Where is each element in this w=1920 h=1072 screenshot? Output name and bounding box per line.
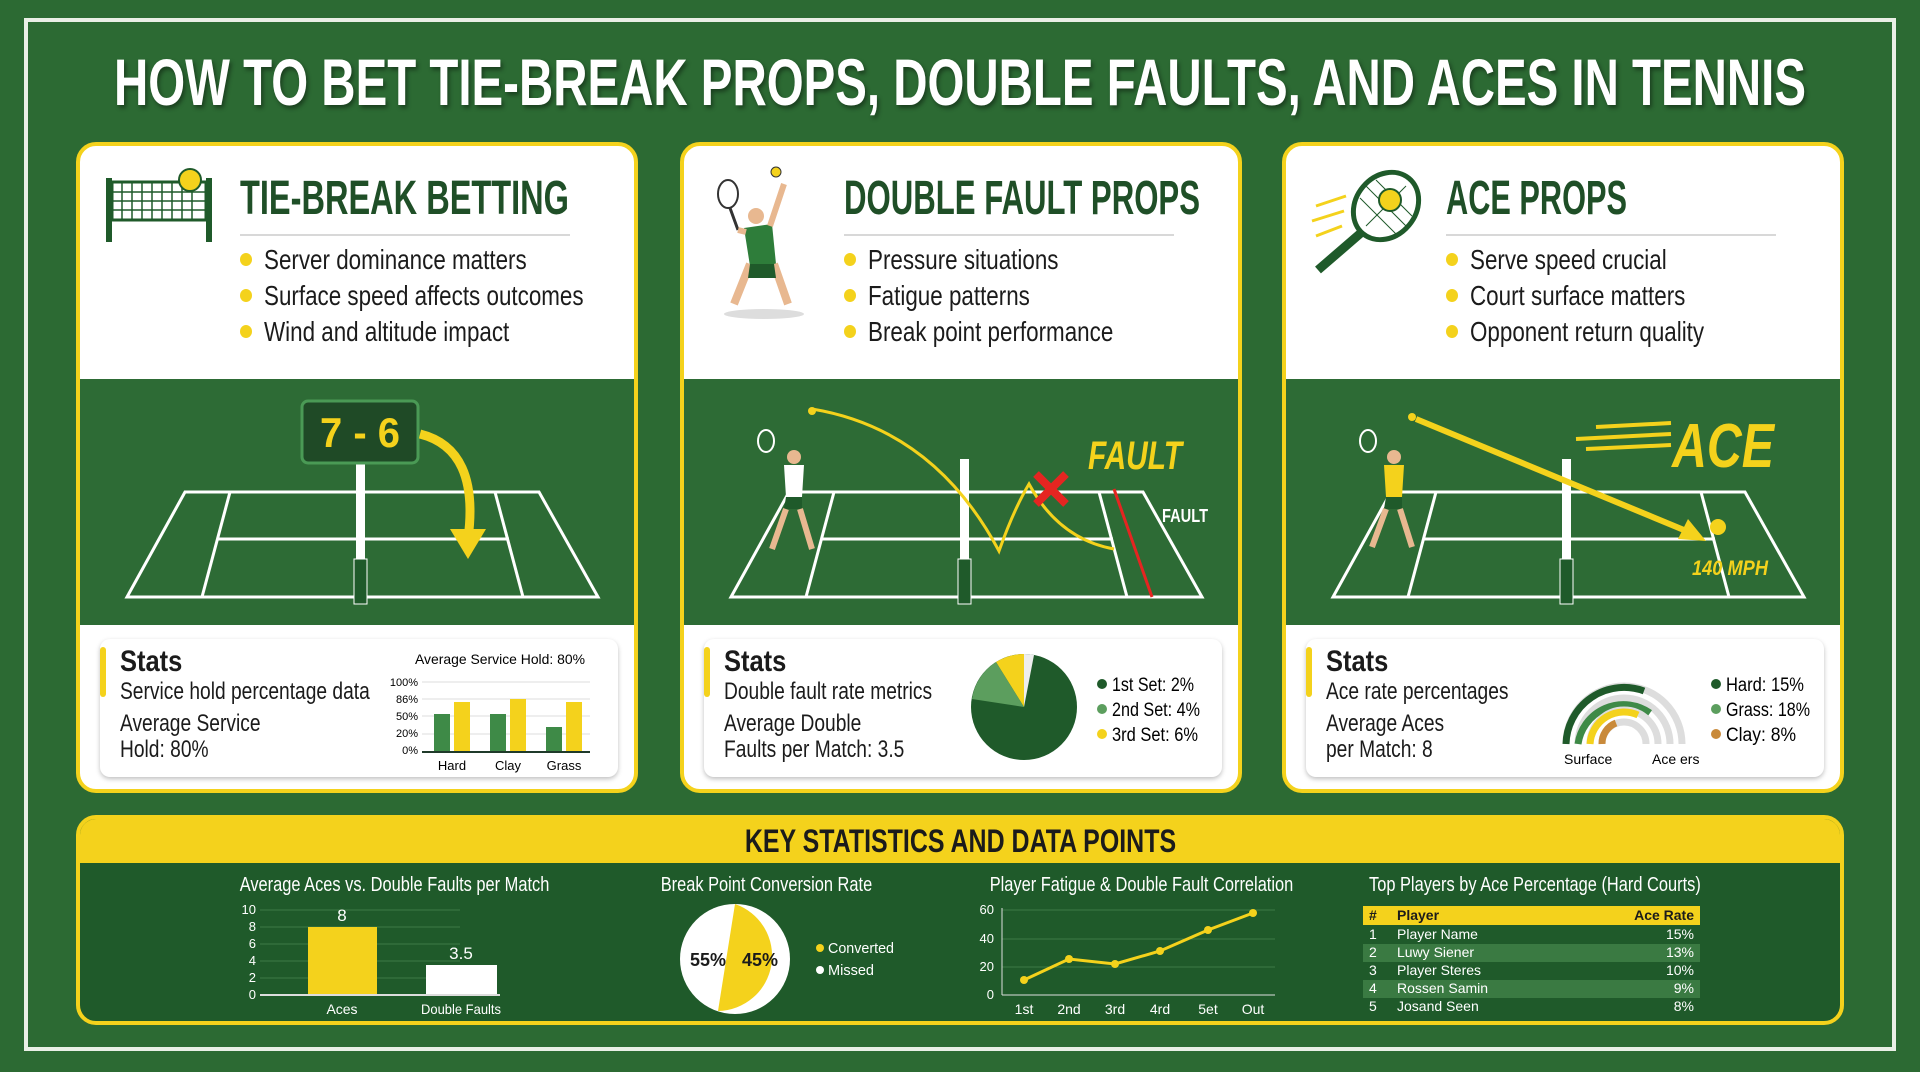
FAULT text: FAULT — [1088, 434, 1185, 478]
gauge chart — [1562, 675, 1810, 767]
gauge chart: Surface — [1564, 751, 1612, 767]
chart: fatigue line: 40 — [980, 931, 994, 946]
table: top players: Player — [1397, 907, 1440, 923]
chart: break point pie: Break Point Conversion Rate — [661, 874, 872, 896]
stats box: Stats — [1326, 645, 1388, 678]
table: top players: 13% — [1666, 944, 1694, 960]
pie chart: double faults by set: 1st Set: 2% — [1112, 675, 1194, 696]
gauge chart: Grass: 18% — [1726, 700, 1810, 721]
scoreboard 7-6 — [302, 401, 418, 463]
player — [758, 407, 816, 549]
chart: fatigue line: 60 — [980, 902, 994, 917]
icon: net with ball — [106, 168, 212, 242]
chart: fatigue line — [980, 874, 1293, 1017]
pie chart: double faults by set: 3rd Set: 6% — [1112, 725, 1198, 746]
bar chart: service hold: Hard — [438, 758, 466, 773]
stats box: Stats — [724, 645, 786, 678]
table: top players: 10% — [1666, 962, 1694, 978]
stats box: Stats — [120, 645, 182, 678]
illustration: court with scoreboard — [80, 379, 634, 625]
bullet list: Break point performance — [868, 316, 1113, 347]
table: top players: Luwy Siener — [1397, 944, 1474, 960]
panel: key statistics — [76, 815, 1844, 1025]
ACE text: ACE — [1670, 412, 1775, 481]
bar chart: service hold: 50% — [396, 711, 418, 723]
table: top players: Player Name — [1397, 926, 1478, 942]
table: top players: Josand Seen — [1397, 998, 1479, 1014]
bullet list: Fatigue patterns — [868, 280, 1030, 311]
chart: aces vs double faults: 8 — [249, 919, 256, 934]
bar chart: service hold: 100% — [390, 677, 418, 689]
bar chart: service hold: Average Service Hold: 80% — [415, 651, 585, 667]
bullet list — [1446, 244, 1704, 347]
stats box: Average Double — [724, 710, 861, 737]
arrow — [420, 434, 470, 539]
chart: fatigue line: Player Fatigue & Double Fault Correlation — [990, 874, 1293, 896]
stats box — [100, 639, 618, 777]
bar chart: service hold: Clay — [495, 758, 521, 773]
chart: fatigue line: 20 — [980, 959, 994, 974]
table: top players: 15% — [1666, 926, 1694, 942]
chart: fatigue line: Out — [1242, 1001, 1264, 1017]
pie chart: double faults by set — [971, 654, 1200, 760]
bar chart: service hold: 20% — [396, 728, 418, 740]
chart: fatigue line: 2nd — [1057, 1001, 1081, 1017]
panel: double fault props — [680, 142, 1242, 793]
table: top players — [1363, 874, 1701, 1014]
stats box: Ace rate percentages — [1326, 678, 1509, 705]
bar chart: service hold: 86% — [396, 694, 418, 706]
gauge chart: Clay: 8% — [1726, 725, 1796, 746]
bullet list: Serve speed crucial — [1470, 244, 1667, 275]
gauge chart: Ace ers — [1652, 751, 1699, 767]
chart: aces vs double faults: 4 — [249, 953, 256, 968]
chart: fatigue line: 0 — [987, 987, 994, 1002]
scoreboard 7-6: 7 - 6 — [320, 409, 400, 456]
illustration: fault serve: FAULT — [1162, 506, 1208, 526]
table: top players: 5 — [1369, 998, 1377, 1014]
table: top players: 2 — [1369, 944, 1377, 960]
pie chart: double faults by set: 2nd Set: 4% — [1112, 700, 1200, 721]
heading — [80, 819, 1840, 863]
table: top players: 1 — [1369, 926, 1377, 942]
illustration: ace serve — [1286, 379, 1840, 625]
bullet list: Wind and altitude impact — [264, 316, 509, 347]
bullet list: Pressure situations — [868, 244, 1058, 275]
chart: break point pie: 55% — [690, 950, 726, 970]
stats box: Average Service — [120, 710, 261, 737]
chart: break point pie — [661, 874, 894, 1014]
bullet list: Opponent return quality — [1470, 316, 1704, 347]
bullet list: Surface speed affects outcomes — [264, 280, 584, 311]
chart: fatigue line: 4rd — [1150, 1001, 1170, 1017]
stats box: Faults per Match: 3.5 — [724, 736, 904, 763]
chart: fatigue line: 1st — [1015, 1001, 1033, 1017]
chart: fatigue line: 5et — [1198, 1001, 1218, 1017]
stats box: Double fault rate metrics — [724, 678, 932, 705]
chart: aces vs double faults: 3.5 — [449, 944, 473, 963]
chart: break point pie: Converted — [828, 940, 894, 957]
stats box: Service hold percentage data — [120, 678, 370, 705]
table: top players: 4 — [1369, 980, 1377, 996]
red X — [1036, 474, 1066, 504]
table: top players: # — [1369, 907, 1377, 923]
bullet list: Court surface matters — [1470, 280, 1685, 311]
illustration: ace serve: 140 MPH — [1692, 557, 1769, 580]
table: top players: 8% — [1674, 998, 1694, 1014]
bar chart: service hold: 0% — [402, 745, 418, 757]
bullet list — [240, 244, 584, 347]
bullet list — [844, 244, 1113, 347]
bar chart: service hold — [390, 651, 590, 773]
stats box: per Match: 8 — [1326, 736, 1433, 763]
chart: aces vs double faults: 10 — [242, 902, 256, 917]
table: top players: Player Steres — [1397, 962, 1481, 978]
stats box — [704, 639, 1222, 777]
heading: ACE PROPS — [1446, 172, 1627, 225]
chart: break point pie: Missed — [828, 962, 874, 979]
chart: aces vs double faults: 2 — [249, 970, 256, 985]
illustration: fault serve — [684, 379, 1238, 625]
table: top players: Top Players by Ace Percentage (Hard Courts) — [1369, 874, 1701, 896]
icon: serving player — [717, 166, 804, 319]
stats box — [1306, 639, 1824, 777]
stats box: Average Aces — [1326, 710, 1444, 737]
chart: fatigue line: 3rd — [1105, 1001, 1125, 1017]
panel: tie-break betting — [76, 142, 638, 793]
player — [1360, 413, 1416, 547]
chart: aces vs double faults: 8 — [337, 906, 347, 925]
bullet list: Server dominance matters — [264, 244, 527, 275]
chart: aces vs double faults: Aces — [326, 1001, 358, 1017]
chart: aces vs double faults: Average Aces vs. Double Faults per Match — [240, 874, 549, 896]
table: top players: Ace Rate — [1634, 907, 1694, 923]
panel: ace props — [1282, 142, 1844, 793]
bar chart: service hold: Grass — [547, 758, 582, 773]
chart: break point pie: 45% — [742, 950, 778, 970]
stats box: Hold: 80% — [120, 736, 209, 763]
arrow — [1416, 419, 1696, 535]
chart: aces vs double faults: 6 — [249, 936, 256, 951]
table: top players: 9% — [1674, 980, 1694, 996]
chart: aces vs double faults: Double Faults — [421, 1001, 501, 1017]
table: top players: 3 — [1369, 962, 1377, 978]
chart: aces vs double faults — [240, 874, 549, 1017]
table: top players: Rossen Samin — [1397, 980, 1488, 996]
heading: KEY STATISTICS AND DATA POINTS — [744, 823, 1176, 859]
chart: aces vs double faults: 0 — [249, 987, 256, 1002]
icon: racket with ball — [1312, 170, 1422, 274]
gauge chart: Hard: 15% — [1726, 675, 1804, 696]
